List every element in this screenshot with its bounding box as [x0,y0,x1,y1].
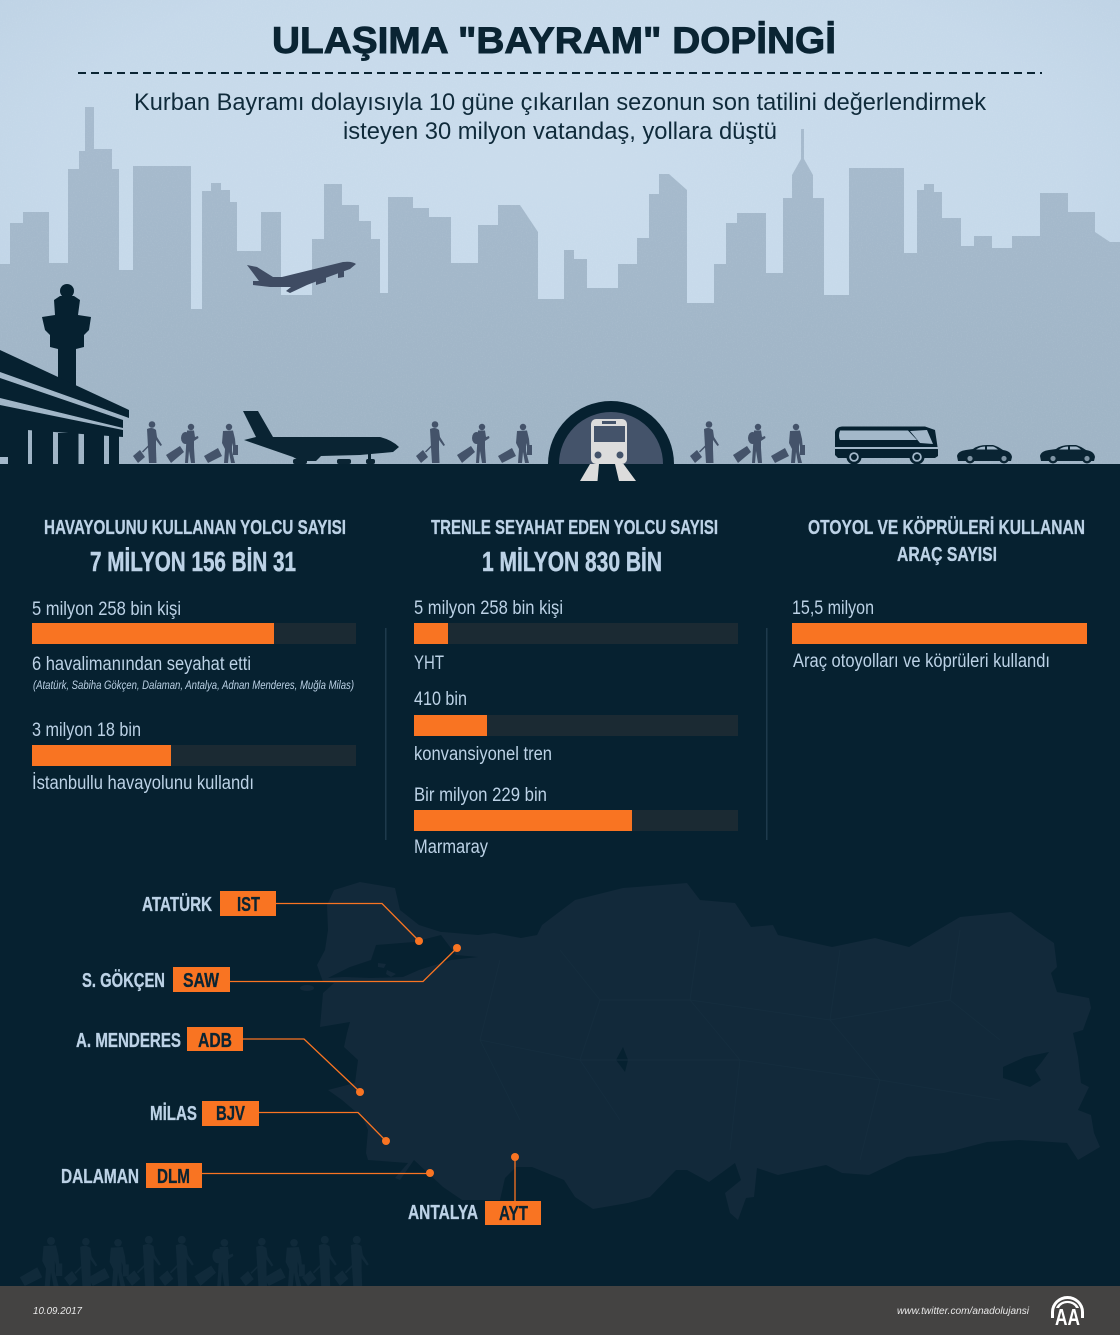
subtitle: Kurban Bayramı dolayısıyla 10 güne çıkarılan sezonun son tatilini değerlendirmek [134,89,987,116]
icon: train rails [580,464,636,481]
icon: car 2 [1040,445,1095,464]
icon: bus [835,426,938,464]
passengers group 1 [133,421,238,463]
icon: car 1 [957,445,1012,464]
panel: train passengers: YHT [414,653,444,674]
subtitle [134,89,987,145]
callout: S. Gökçen SAW: S. GÖKÇEN [82,969,165,992]
bar: 3 million 18 thousand [32,745,356,766]
callout: A. Menderes ADB: A. MENDERES [76,1030,181,1052]
callout: Dalaman DLM [61,1163,434,1188]
panel: air passengers: 3 milyon 18 bin [32,720,141,741]
panel: highways and bridges [792,516,1087,672]
number: train total: 1 MİLYON 830 BİN [482,546,662,577]
panel: air passengers: (Atatürk, Sabiha Gökçen, Dalaman, Antalya, Adnan Menderes, Muğla Milas) [33,680,354,692]
callout: Dalaman DLM: DALAMAN [61,1166,139,1188]
subtitle: isteyen 30 milyon vatandaş, yollara düştü [343,118,777,145]
lake: Tuz [616,1047,628,1072]
panel: train passengers: konvansiyonel tren [414,744,552,765]
icon: AA logo [1051,1296,1084,1330]
callout: A. Menderes ADB: ADB [198,1030,232,1052]
panel: train passengers [414,517,738,858]
panel: train passengers: Marmaray [414,837,488,858]
panel: highways and bridges: 15,5 milyon [792,598,874,619]
title: ULAŞIMA "BAYRAM" DOPİNGİ [272,20,836,61]
skyline silhouette [0,107,1120,465]
callout: Milas BJV: MİLAS [150,1102,197,1125]
callout: Atatürk IST: IST [237,894,260,916]
footer twitter link: www.twitter.com/anadolujansi [897,1306,1030,1317]
heading: highways: ARAÇ SAYISI [897,544,997,566]
callout: Antalya AYT: AYT [499,1203,528,1225]
callout: Dalaman DLM: DLM [157,1166,190,1188]
bar: Marmaray [414,810,738,831]
callout: S. Gökçen SAW: SAW [183,970,219,992]
passengers group 2 [416,421,532,463]
callout: Antalya AYT: ANTALYA [408,1202,478,1224]
panel: highways and bridges: Araç otoyolları ve köprüleri kullandı [793,651,1050,672]
icon: flying plane [247,262,356,293]
bar: 5 million 258 thousand [32,623,356,644]
heading: air: HAVAYOLUNU KULLANAN YOLCU SAYISI [44,517,346,539]
callout: S. Gökçen SAW [82,944,461,992]
bar: YHT [414,623,738,644]
footer bar [0,1286,1120,1335]
callout: Atatürk IST [142,891,423,945]
callout: Milas BJV [150,1101,390,1145]
number: air total: 7 MİLYON 156 BİN 31 [90,546,296,577]
map: Turkey [300,882,1100,1220]
panel: air passengers: 5 milyon 258 bin kişi [32,599,181,620]
callout: Atatürk IST: ATATÜRK [142,893,212,916]
panel: air passengers [32,517,356,794]
passengers group 3 [690,421,805,463]
heading: highways [808,516,1085,566]
lake: Van [1003,1052,1049,1087]
bar: conventional train [414,715,738,736]
callout: A. Menderes ADB [76,1027,364,1096]
panel: sky background [0,0,1120,465]
panel: air passengers: 6 havalimanından seyahat etti [32,654,251,675]
bar: 15.5 million [792,623,1087,644]
icon: AA logo: AA [1055,1304,1080,1330]
heading: train: TRENLE SEYAHAT EDEN YOLCU SAYISI [431,517,718,539]
callout: Antalya AYT [408,1153,541,1225]
panel: train passengers: 5 milyon 258 bin kişi [414,598,563,619]
panel: train passengers: 410 bin [414,689,467,710]
callout: Milas BJV: BJV [216,1103,245,1125]
icon: parked airplane [243,411,399,464]
panel: dark lower section [0,464,1120,1286]
panel: train passengers: Bir milyon 229 bin [414,785,547,806]
icon: airport terminal and tower [0,284,129,464]
ghost passengers [20,1236,369,1286]
footer date: 10.09.2017 [33,1306,82,1317]
icon: tunnel with train [548,401,674,527]
panel: air passengers: İstanbullu havayolunu kullandı [32,773,254,794]
